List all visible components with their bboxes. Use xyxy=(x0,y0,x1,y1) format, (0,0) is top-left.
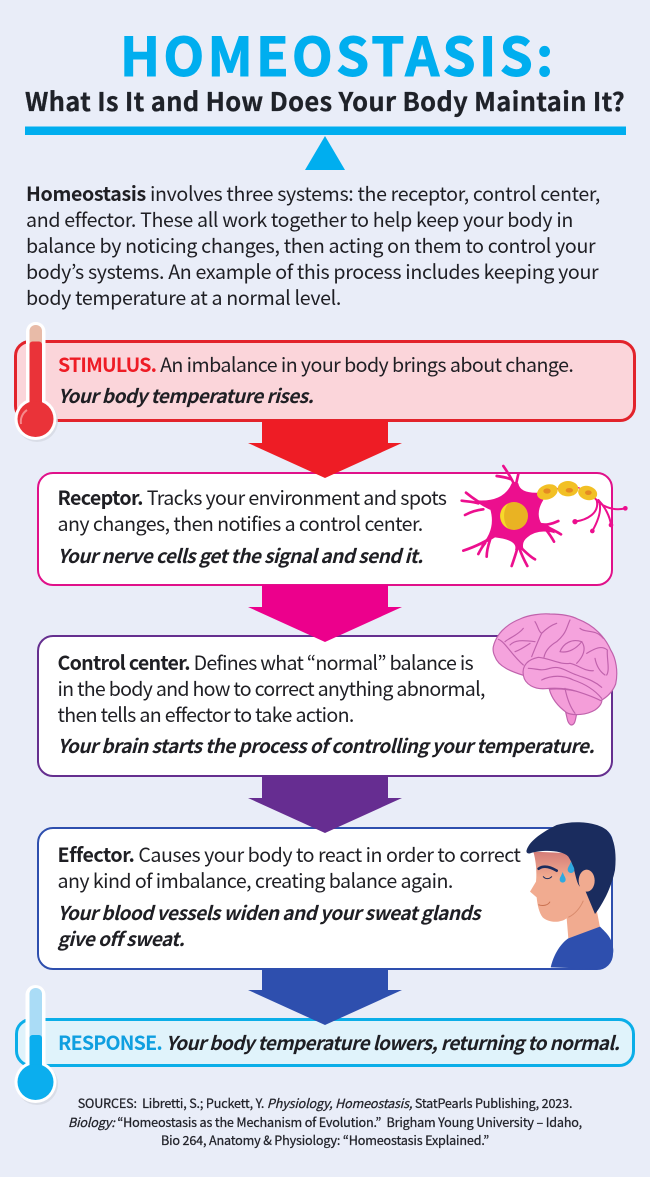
effector example xyxy=(58,899,482,952)
intro text: and effector. These all work together to help keep your body in xyxy=(26,204,573,233)
panel: effector xyxy=(37,827,613,970)
receptor example: Your nerve cells get the signal and send it. xyxy=(58,542,423,569)
title: HOMEOSTASIS: xyxy=(120,16,557,92)
effector text: any kind of imbalance, creating balance again. xyxy=(58,865,453,894)
panel: stimulus xyxy=(14,340,636,422)
effector text: Effector. Causes your body to react in order to correct xyxy=(58,839,520,868)
receptor text: any changes, then notifies a control center. xyxy=(58,508,423,537)
receptor text xyxy=(58,482,446,537)
stimulus text: STIMULUS. An imbalance in your body brings about change. xyxy=(58,349,573,378)
title rule and pointer xyxy=(25,126,626,170)
subtitle: What Is It and How Does Your Body Maintain It? xyxy=(25,82,625,119)
arrow: stimulus to receptor xyxy=(248,420,402,478)
sources: Biology: “Homeostasis as the Mechanism of Evolution.” Brigham Young University – Idaho, xyxy=(68,1112,582,1130)
arrow: receptor to control center xyxy=(248,585,402,642)
icon: hot thermometer xyxy=(14,322,58,442)
icon: brain xyxy=(492,613,618,726)
effector text xyxy=(58,839,521,894)
intro text: Homeostasis involves three systems: the receptor, control center, xyxy=(26,178,600,207)
arrow: control center to effector xyxy=(248,777,402,833)
panel: receptor xyxy=(37,472,613,586)
response text: RESPONSE. Your body temperature lowers, returning to normal. xyxy=(58,1027,619,1056)
stimulus example: Your body temperature rises. xyxy=(58,382,313,409)
sources xyxy=(68,1093,582,1149)
receptor text: Receptor. Tracks your environment and spots xyxy=(58,482,446,511)
sources: SOURCES: Libretti, S.; Puckett, Y. Physiology, Homeostasis, StatPearls Publishing, 2023. xyxy=(78,1093,572,1112)
panel: response xyxy=(15,1018,635,1067)
icon: nerve cell xyxy=(460,464,628,568)
icon: sweating head xyxy=(526,822,616,968)
effector example: Your blood vessels widen and your sweat glands xyxy=(58,899,480,926)
control center text: then tells an effector to take action. xyxy=(58,699,354,728)
intro text: body temperature at a normal level. xyxy=(26,282,341,311)
intro text xyxy=(26,178,600,311)
effector example: give off sweat. xyxy=(58,925,184,952)
intro text: balance by noticing changes, then acting on them to control your xyxy=(26,230,595,259)
panel: control center xyxy=(37,635,613,777)
sources: Bio 264, Anatomy & Physiology: “Homeostasis Explained.” xyxy=(161,1130,489,1149)
control center text: Control center. Defines what “normal” balance is xyxy=(58,647,473,676)
icon: cold thermometer xyxy=(14,985,58,1105)
control center text: in the body and how to correct anything abnormal, xyxy=(58,673,485,702)
intro text: body’s systems. An example of this process includes keeping your xyxy=(26,256,598,285)
control center example: Your brain starts the process of controlling your temperature. xyxy=(58,732,594,759)
control center text xyxy=(58,647,485,728)
arrow: effector to response xyxy=(248,970,402,1025)
